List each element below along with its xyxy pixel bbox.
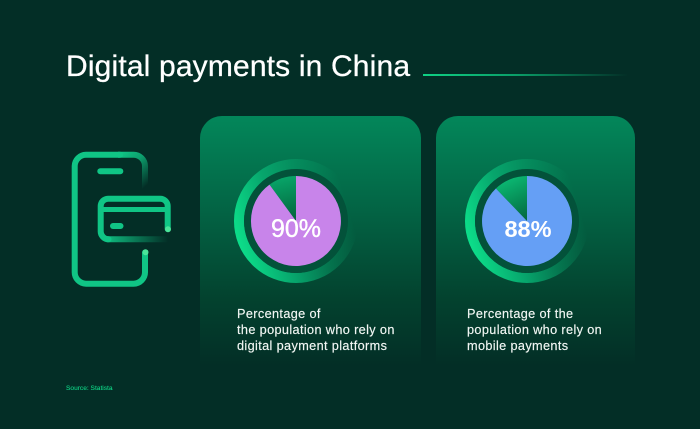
inner disc bbox=[244, 169, 348, 273]
text: mobile description bbox=[467, 306, 602, 353]
text: platforms description: Percentage of bbox=[237, 306, 321, 320]
ring bbox=[239, 164, 353, 278]
icon: phone outline left and bottom bbox=[75, 155, 145, 284]
chart: 90% pie bbox=[239, 164, 353, 278]
source: Source: Statista bbox=[66, 385, 113, 392]
text: mobile description: population who rely on bbox=[467, 323, 602, 337]
remaining share wedge bbox=[496, 176, 527, 221]
panel: mobile payments bbox=[436, 116, 635, 366]
icon: phone with payment card bbox=[75, 155, 171, 284]
title underline bbox=[423, 74, 628, 76]
text: platforms description: digital payment platforms bbox=[237, 339, 387, 353]
icon: phone outline fading top right bbox=[118, 155, 145, 192]
90% share slice bbox=[251, 176, 341, 266]
title: Digital payments in China bbox=[66, 50, 410, 83]
remaining share wedge bbox=[270, 176, 296, 221]
88% share slice bbox=[482, 176, 572, 266]
icon: card outline bbox=[101, 199, 168, 239]
icon: card chip bbox=[113, 223, 120, 229]
ring bbox=[470, 164, 584, 278]
icon: card bottom fading edge bbox=[107, 236, 168, 242]
text: mobile description: Percentage of the bbox=[467, 306, 573, 320]
value: 90%: 90% bbox=[271, 215, 321, 243]
icon: phone end dot bbox=[142, 249, 148, 255]
icon: card end dot bbox=[165, 226, 171, 232]
panel: digital payment platforms bbox=[200, 116, 421, 366]
inner disc bbox=[475, 169, 579, 273]
text: mobile description: mobile payments bbox=[467, 339, 568, 353]
icon: card stripe bbox=[101, 207, 168, 212]
chart: 88% pie bbox=[470, 164, 584, 278]
icon: phone speaker bbox=[100, 168, 120, 174]
value: 88%: 88% bbox=[504, 216, 552, 242]
text: platforms description: the population who rely on bbox=[237, 323, 395, 337]
text: platforms description bbox=[237, 306, 395, 353]
